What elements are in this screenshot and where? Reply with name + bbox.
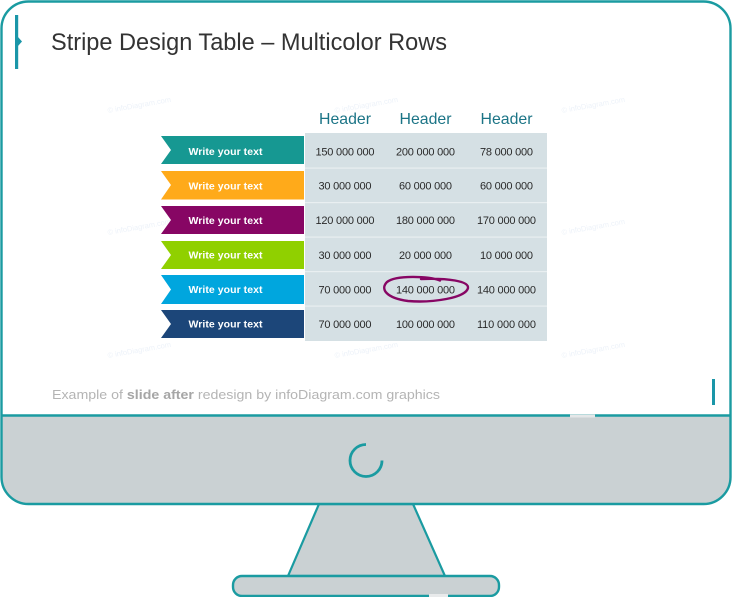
watermarks: © infoDiagram.com: [334, 95, 399, 115]
monitor stand base: [233, 576, 499, 597]
power button icon: [350, 444, 382, 476]
table values: 30 000 000: [318, 180, 372, 192]
table values: [316, 146, 536, 331]
watermarks: © infoDiagram.com: [561, 217, 626, 237]
row label: orange: [161, 171, 304, 200]
column headers: Header: [400, 111, 452, 128]
title: Stripe Design Table – Multicolor Rows: [51, 29, 447, 56]
column headers: Header: [480, 111, 533, 128]
table values: 140 000 000: [396, 284, 455, 296]
row label: orange: Write your text: [188, 180, 263, 192]
table values: 180 000 000: [396, 215, 455, 227]
table values: 70 000 000: [318, 319, 372, 331]
row label: purple: [161, 206, 304, 234]
column headers: [319, 111, 533, 128]
row label: blue: Write your text: [188, 284, 263, 296]
watermarks: © infoDiagram.com: [107, 217, 172, 237]
row labels: [161, 136, 304, 338]
watermarks: © infoDiagram.com: [561, 340, 626, 360]
watermarks: [107, 95, 626, 360]
table values: 30 000 000: [318, 250, 372, 262]
row label: navy: Write your text: [188, 318, 263, 330]
watermarks: © infoDiagram.com: [107, 95, 172, 115]
row label: green: Write your text: [188, 250, 263, 262]
table values: 60 000 000: [480, 180, 533, 192]
hand-drawn highlight circle: [384, 277, 468, 301]
table values: 20 000 000: [399, 250, 452, 262]
column headers: Header: [319, 111, 372, 128]
table values: 120 000 000: [316, 215, 374, 227]
row label: blue: [161, 275, 304, 304]
table values: 10 000 000: [480, 250, 533, 262]
table values: 150 000 000: [316, 146, 374, 158]
table values: 78 000 000: [480, 146, 533, 158]
table values: 60 000 000: [399, 180, 452, 192]
table values: 70 000 000: [318, 284, 372, 296]
table values: 100 000 000: [396, 319, 455, 331]
table values: 140 000 000: [477, 284, 536, 296]
table background: [305, 133, 547, 341]
monitor stand neck: [288, 504, 445, 576]
watermarks: © infoDiagram.com: [334, 217, 399, 237]
corner accent bar: [712, 379, 715, 405]
table values: 110 000 000: [477, 319, 536, 331]
row label: navy: [161, 310, 304, 338]
table values: 200 000 000: [396, 146, 455, 158]
row label: green: [161, 241, 304, 269]
row label: purple: Write your text: [188, 215, 263, 227]
table values: 170 000 000: [477, 215, 536, 227]
footer caption: Example of slide after redesign by infoDiagram.com graphics: [52, 387, 441, 402]
watermarks: © infoDiagram.com: [561, 95, 626, 115]
watermarks: © infoDiagram.com: [107, 340, 172, 360]
row label: teal: [161, 136, 304, 164]
watermarks: © infoDiagram.com: [334, 340, 399, 360]
row label: teal: Write your text: [188, 146, 263, 158]
title accent bar: [15, 15, 22, 69]
